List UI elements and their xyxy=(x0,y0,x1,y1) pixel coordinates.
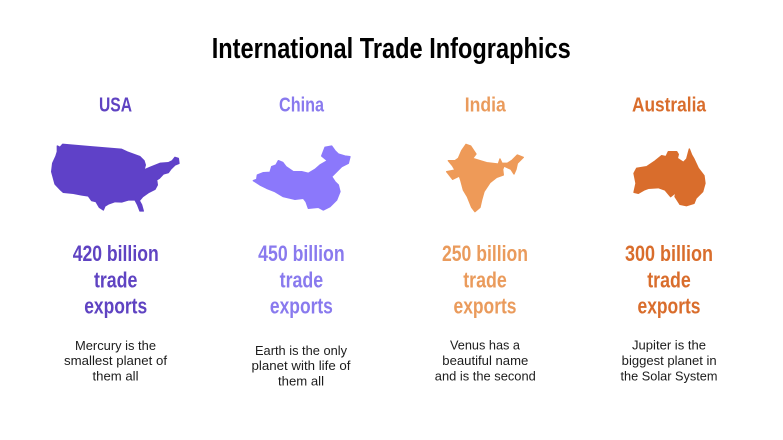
panel: Australia xyxy=(620,94,718,384)
description: Earth: planet with life of xyxy=(252,358,351,373)
title: International Trade Infographics xyxy=(212,33,571,65)
heading: USA: USA xyxy=(99,94,132,116)
stat: 300 billion trade exports: 300 billion xyxy=(625,241,713,266)
stat: 420 billion trade exports: 420 billion xyxy=(73,241,159,266)
stat: 450 billion trade exports xyxy=(258,241,345,318)
description: Jupiter: the Solar System xyxy=(620,369,718,384)
heading: India: India xyxy=(465,94,507,116)
stat: 250 billion trade exports: exports xyxy=(454,294,516,318)
stat: 420 billion trade exports xyxy=(73,241,159,318)
description: Venus xyxy=(435,338,536,384)
stat: 250 billion trade exports: 250 billion xyxy=(442,241,528,266)
description: Venus: beautiful name xyxy=(442,353,528,368)
map: China xyxy=(253,146,350,210)
description: Venus: Venus has a xyxy=(450,338,521,352)
stat: 250 billion trade exports xyxy=(442,241,528,318)
heading: Australia: Australia xyxy=(632,94,707,116)
stat: 450 billion trade exports: 450 billion xyxy=(258,241,345,266)
description: Earth: them all xyxy=(278,374,324,389)
stat: 300 billion trade exports xyxy=(625,241,713,318)
map: Australia xyxy=(634,149,705,206)
stat: 420 billion trade exports: exports xyxy=(84,294,147,318)
description: Jupiter: Jupiter is the xyxy=(632,338,706,352)
description: Mercury xyxy=(64,338,167,384)
description: Jupiter: biggest planet in xyxy=(622,353,717,368)
stat: 300 billion trade exports: trade xyxy=(647,268,691,293)
description: Jupiter xyxy=(620,338,718,384)
description: Mercury: smallest planet of xyxy=(64,353,167,368)
stat: 420 billion trade exports: trade xyxy=(94,268,137,293)
map: India xyxy=(447,144,523,212)
panel: China xyxy=(252,94,351,389)
panel: USA xyxy=(52,94,179,384)
description: Venus: and is the second xyxy=(435,369,536,384)
description: Earth: Earth is the only xyxy=(255,343,347,358)
stat: 450 billion trade exports: trade xyxy=(280,268,323,293)
panel: India xyxy=(435,94,536,384)
stat: 250 billion trade exports: trade xyxy=(463,268,507,293)
description: Earth xyxy=(252,343,351,389)
stat: 300 billion trade exports: exports xyxy=(638,294,700,318)
map: USA xyxy=(52,144,179,211)
stat: 450 billion trade exports: exports xyxy=(270,294,333,318)
description: Mercury: them all xyxy=(92,369,139,384)
heading: China: China xyxy=(279,94,325,116)
description: Mercury: Mercury is the xyxy=(75,338,156,353)
